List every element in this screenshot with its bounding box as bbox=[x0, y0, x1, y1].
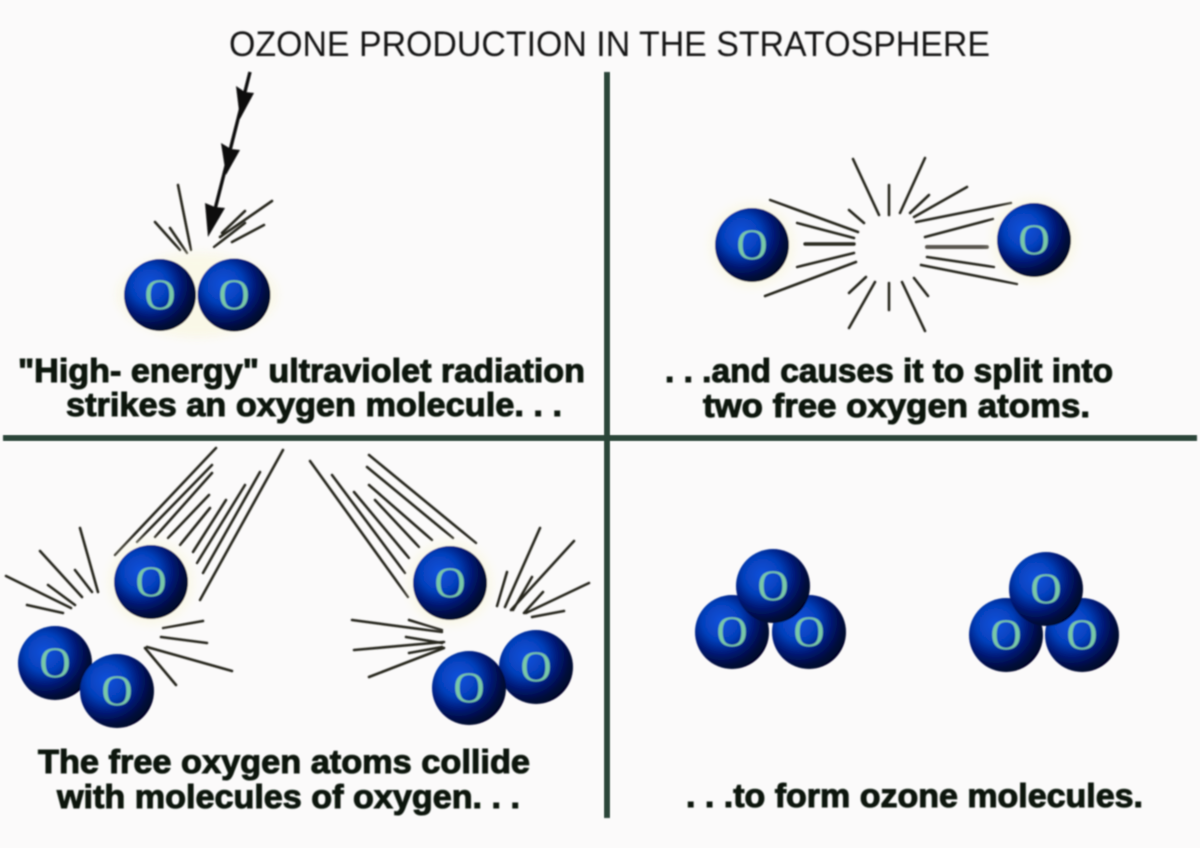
collision lines: left bbox=[6, 528, 232, 685]
impact lines bbox=[155, 185, 272, 253]
caption: panel 1: strikes an oxygen molecule. . . bbox=[66, 386, 562, 423]
ozone molecule: left: O bbox=[757, 563, 789, 610]
free oxygen atom: right: O bbox=[1018, 217, 1050, 264]
panel: molecule splits bbox=[665, 158, 1122, 424]
ozone molecule: right: O bbox=[1066, 612, 1098, 659]
vertical divider bbox=[604, 72, 610, 818]
oxygen molecule: right group: O bbox=[453, 665, 485, 712]
motion lines: right atom bbox=[310, 455, 476, 597]
collision lines: right bbox=[352, 528, 589, 677]
oxygen molecule: O bbox=[218, 272, 250, 319]
arrow: ultraviolet radiation bbox=[205, 72, 254, 237]
caption: panel 2: two free oxygen atoms. bbox=[703, 387, 1090, 424]
panel: radiation strikes molecule bbox=[18, 72, 594, 423]
ozone molecule: right: O bbox=[1030, 566, 1062, 613]
oxygen molecule: right group: O bbox=[520, 644, 552, 691]
free oxygen atom: right group: O bbox=[434, 560, 466, 607]
free oxygen atom: left: O bbox=[736, 222, 768, 269]
horizontal divider bbox=[3, 435, 1197, 441]
oxygen molecule: left group: O bbox=[39, 640, 71, 687]
oxygen molecule: O bbox=[144, 272, 176, 319]
motion lines: left atom bbox=[115, 448, 283, 600]
panel: atoms collide with molecules bbox=[6, 448, 589, 815]
ozone molecule: right bbox=[969, 552, 1119, 672]
caption: panel 2: . . .and causes it to split into bbox=[665, 352, 1113, 389]
free oxygen atom: left group bbox=[109, 540, 193, 624]
burst lines bbox=[765, 158, 1017, 331]
caption: panel 3: with molecules of oxygen. . . bbox=[56, 778, 520, 815]
ozone molecule: left bbox=[695, 549, 846, 669]
caption: panel 1: "High- energy" ultraviolet radiation bbox=[18, 352, 585, 389]
oxygen molecule: left group bbox=[18, 626, 154, 728]
caption: panel 4: . . .to form ozone molecules. bbox=[686, 777, 1143, 814]
ozone molecule: right: O bbox=[990, 612, 1022, 659]
free oxygen atom: right bbox=[992, 198, 1076, 282]
oxygen molecule: right group bbox=[432, 630, 573, 725]
caption: panel 3: The free oxygen atoms collide bbox=[38, 743, 530, 780]
ozone molecule: left: O bbox=[793, 609, 825, 656]
oxygen molecule bbox=[117, 253, 277, 337]
oxygen molecule: left group: O bbox=[101, 668, 133, 715]
title: OZONE PRODUCTION IN THE STRATOSPHERE bbox=[229, 25, 990, 64]
ozone molecule: left: O bbox=[716, 609, 748, 656]
free oxygen atom: left group: O bbox=[135, 559, 167, 606]
free oxygen atom: right group bbox=[408, 541, 492, 625]
panel: ozone molecules formed bbox=[686, 549, 1143, 814]
free oxygen atom: left bbox=[710, 203, 794, 287]
